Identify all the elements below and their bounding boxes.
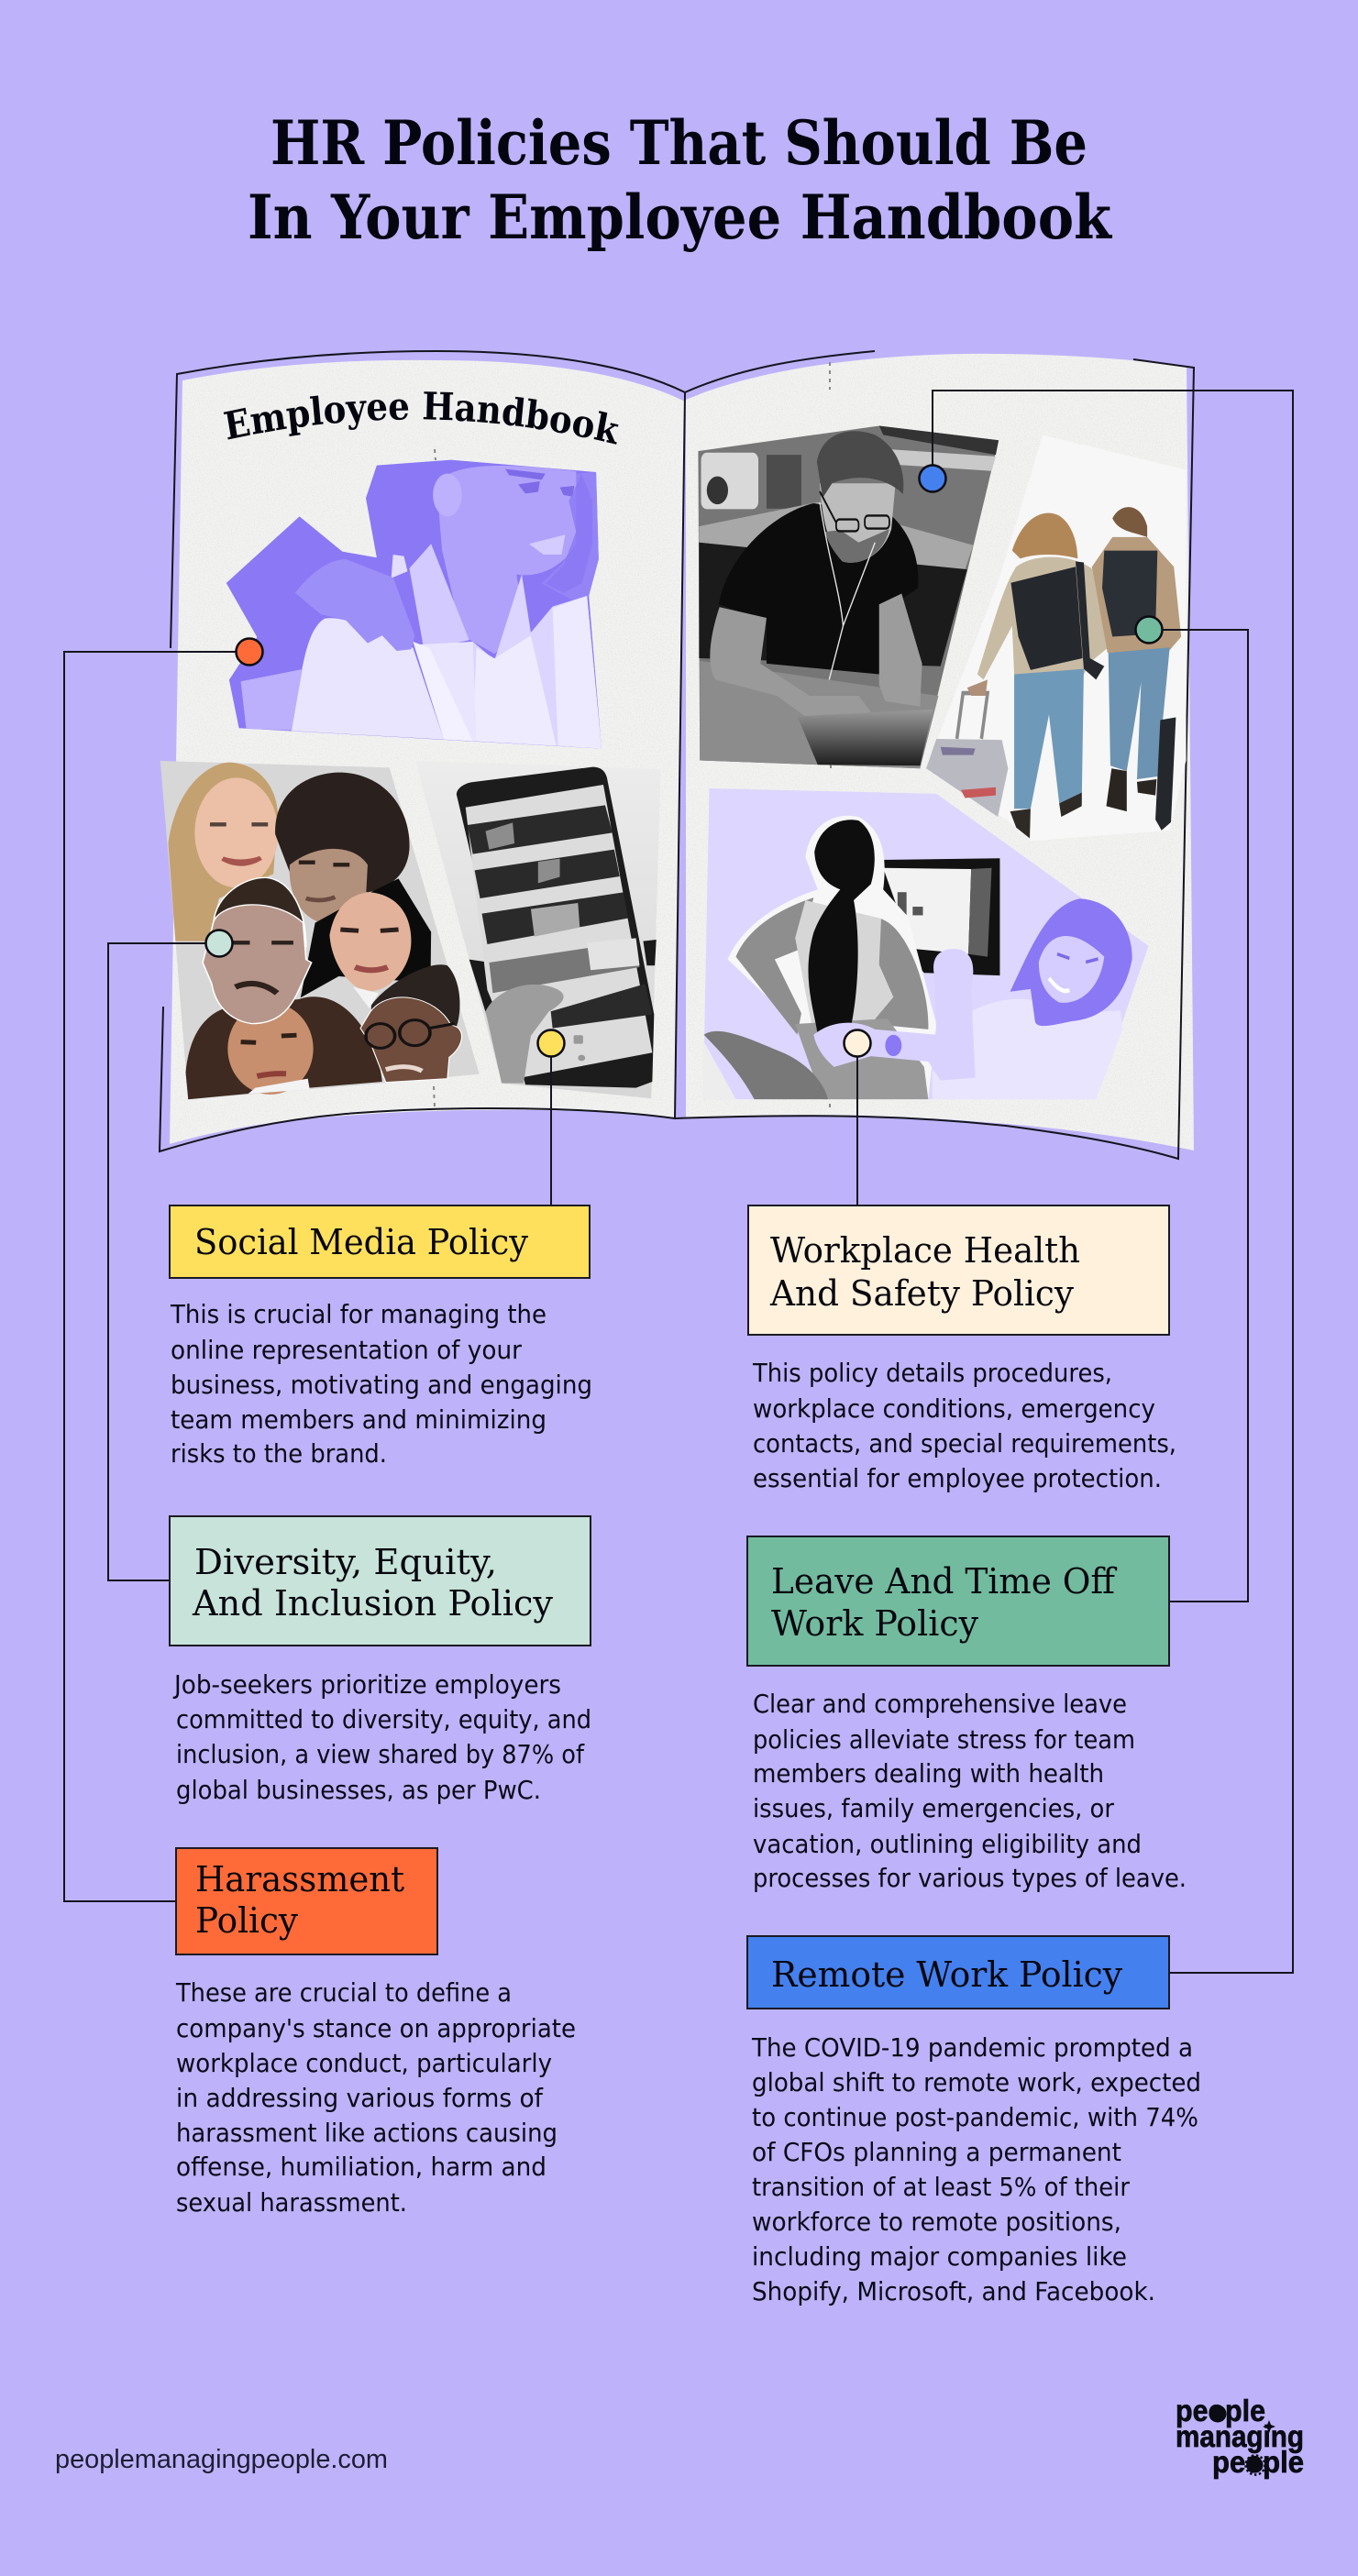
connector: leave and time off: [1149, 630, 1248, 1602]
heading box: [747, 1536, 1169, 1666]
description: including major companies like: [752, 2242, 1127, 2272]
black suitcase: [1155, 717, 1176, 831]
description: [170, 1300, 592, 1469]
description: workplace conduct, particularly: [176, 2049, 552, 2078]
connector: social media: [550, 1043, 552, 1205]
description: workplace conditions, emergency: [753, 1394, 1155, 1424]
connector: harassment: [64, 652, 249, 1901]
description: essential for employee protection.: [753, 1464, 1162, 1493]
description: company's stance on appropriate: [176, 2014, 576, 2043]
description: in addressing various forms of: [176, 2084, 544, 2113]
description: workforce to remote positions,: [752, 2207, 1121, 2237]
woman blonde: [168, 763, 278, 941]
connector: diversity: [108, 943, 219, 1580]
connector: health and safety: [856, 1043, 858, 1205]
description: [751, 2033, 1201, 2306]
man glasses: [371, 964, 459, 1027]
marker: health and safety: [844, 1030, 871, 1056]
panel: diversity policy: [170, 1516, 591, 1805]
connector: remote work: [933, 391, 1293, 1973]
title: In Your Employee Handbook: [248, 182, 1112, 253]
description: Job-seekers prioritize employers: [172, 1670, 561, 1700]
right traveller: [1092, 537, 1181, 653]
panel: remote work policy: [747, 1936, 1201, 2306]
description: contacts, and special requirements,: [753, 1429, 1176, 1459]
book pages paper: [156, 348, 1201, 1155]
woman curly hair: [185, 996, 382, 1099]
heading box: Diversity, Equity,: [194, 1542, 497, 1582]
description: These are crucial to define a: [175, 1978, 512, 2008]
description: offense, humiliation, harm and: [176, 2152, 547, 2182]
panel: social media policy: [170, 1205, 592, 1469]
heading box: [170, 1205, 590, 1278]
marker: social media: [537, 1030, 565, 1056]
description: issues, family emergencies, or: [753, 1794, 1115, 1823]
description: of CFOs planning a permanent: [752, 2138, 1121, 2167]
heading box: Social Media Policy: [194, 1222, 529, 1262]
woman with back pain: [728, 816, 936, 1099]
man body: [719, 503, 918, 675]
logo: people managing people: managing: [1176, 2419, 1304, 2453]
description: This policy details procedures,: [752, 1359, 1112, 1388]
open book illustration: [158, 350, 1195, 1161]
marker: harassment: [237, 638, 262, 666]
description: Clear and comprehensive leave: [753, 1690, 1127, 1719]
heading box: [748, 1205, 1169, 1335]
description: [753, 1690, 1187, 1893]
panel: workplace health and safety policy: [748, 1205, 1176, 1493]
heading box: [176, 1848, 437, 1954]
book outline: [160, 351, 1194, 1159]
description: vacation, outlining eligibility and: [753, 1830, 1142, 1859]
description: global businesses, as per PwC.: [176, 1776, 541, 1805]
woman stretching: [933, 999, 1122, 1099]
logo: people managing people: people: [1212, 2445, 1304, 2479]
logo: people managing people: [1176, 2394, 1304, 2479]
heading box: And Safety Policy: [769, 1273, 1075, 1314]
heading: Employee Handbook: Employee Handbook: [224, 391, 618, 445]
laptop: [797, 710, 933, 765]
heading box: Policy: [195, 1900, 299, 1941]
title: [248, 107, 1112, 253]
description: committed to diversity, equity, and: [176, 1705, 591, 1734]
suitcase: [957, 693, 988, 739]
heading box: Work Policy: [771, 1603, 979, 1644]
description: transition of at least 5% of their: [752, 2173, 1131, 2202]
marker: leave: [1135, 616, 1163, 644]
heading box: And Inclusion Policy: [192, 1583, 554, 1624]
photo: stretching at workplace: [703, 788, 1148, 1099]
photo: man working on laptop: [698, 425, 999, 768]
description: risks to the brand.: [171, 1439, 387, 1469]
heading box: [747, 1936, 1169, 2009]
photo: woman with hand on shoulder: [226, 460, 602, 749]
description: global shift to remote work, expected: [752, 2068, 1201, 2097]
logo: people managing people: people: [1176, 2394, 1265, 2427]
description: [175, 1978, 576, 2218]
man curly hair: [275, 773, 410, 892]
panel: leave and time off policy: [747, 1536, 1187, 1893]
description: Shopify, Microsoft, and Facebook.: [752, 2277, 1155, 2306]
photo: couple with luggage: [926, 435, 1187, 841]
heading box: [170, 1516, 591, 1646]
title: HR Policies That Should Be: [270, 107, 1088, 179]
description: The COVID-19 pandemic prompted a: [751, 2033, 1193, 2063]
description: inclusion, a view shared by 87% of: [176, 1740, 585, 1769]
description: processes for various types of leave.: [753, 1864, 1187, 1893]
footer url: peoplemanagingpeople.com: [55, 2445, 388, 2474]
chair: [704, 1031, 828, 1099]
photo: diverse faces collage: [160, 761, 480, 1099]
panel: harassment policy: [175, 1848, 576, 2218]
woman asian: [301, 878, 431, 997]
left traveller: [977, 557, 1109, 679]
description: online representation of your: [171, 1336, 523, 1365]
marker: diversity: [205, 930, 233, 957]
description: to continue post-pandemic, with 74%: [752, 2103, 1198, 2132]
description: policies alleviate stress for team: [753, 1725, 1135, 1755]
description: harassment like actions causing: [176, 2119, 558, 2148]
monitor: [875, 858, 999, 975]
heading box: Remote Work Policy: [771, 1954, 1123, 1995]
photo: phone social media: [415, 761, 660, 1098]
description: team members and minimizing: [171, 1405, 547, 1435]
marker: remote work: [919, 466, 946, 491]
description: [752, 1359, 1176, 1493]
description: members dealing with health: [753, 1759, 1104, 1789]
man moustache: [214, 877, 306, 947]
description: This is crucial for managing the: [170, 1300, 547, 1329]
heading box: Harassment: [195, 1859, 404, 1899]
description: business, motivating and engaging: [171, 1371, 592, 1400]
description: [172, 1670, 591, 1805]
heading box: Workplace Health: [770, 1230, 1080, 1271]
heading box: Leave And Time Off: [771, 1561, 1118, 1602]
description: sexual harassment.: [176, 2188, 407, 2218]
